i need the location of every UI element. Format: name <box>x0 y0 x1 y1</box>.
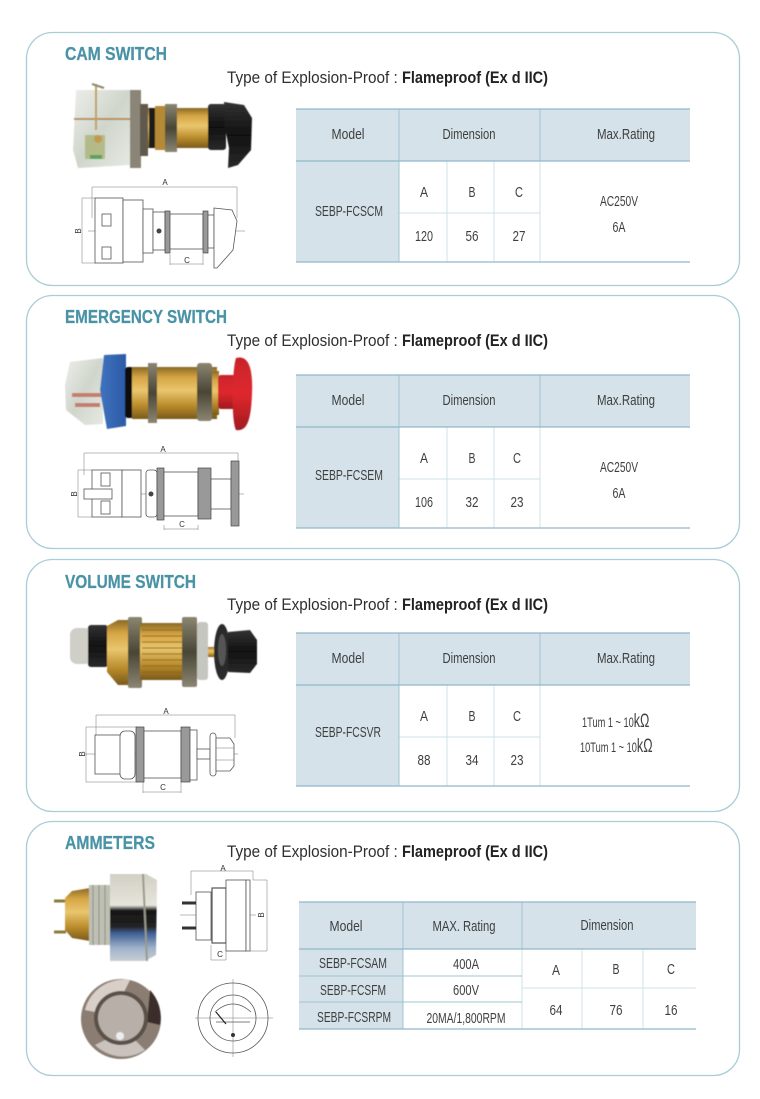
table: volume switch: 88 <box>418 753 430 769</box>
table: ammeters: Dimension <box>580 918 634 934</box>
explosion-proof type line: Flameproof (Ex d IIC) <box>402 68 548 87</box>
table: emergency switch: 32 <box>466 495 478 511</box>
dimension labels: B <box>70 491 79 497</box>
panel: emergency switch <box>26 296 740 548</box>
dimension labels: C <box>160 783 166 792</box>
table: ammeters: 76 <box>610 1003 622 1019</box>
table: emergency switch: 106 <box>415 495 433 511</box>
dimension labels: B <box>78 751 87 757</box>
table: ammeters: MAX. Rating <box>432 919 496 935</box>
dimension labels: B <box>74 228 83 234</box>
explosion-proof type line: Type of Explosion-Proof : <box>227 595 402 614</box>
table: ammeters: 16 <box>664 1003 678 1019</box>
table: cam switch: 56 <box>466 229 478 245</box>
table: emergency switch <box>296 375 690 528</box>
table: cam switch: A <box>420 185 428 201</box>
table: emergency switch: SEBP-FCSEM <box>315 468 383 484</box>
explosion-proof type line: Type of Explosion-Proof : <box>227 68 402 87</box>
table: volume switch: SEBP-FCSVR <box>315 725 381 741</box>
dimension labels: A <box>162 178 168 187</box>
dimension labels: C <box>217 950 223 959</box>
table: cam switch: 27 <box>512 229 526 245</box>
heading: emergency switch: EMERGENCY SWITCH <box>65 307 227 327</box>
photo: emergency switch <box>65 354 252 430</box>
dimension labels: A <box>163 707 169 716</box>
table: ammeters: 600V <box>453 983 479 999</box>
table: cam switch: Model <box>332 127 364 143</box>
table: volume switch: 23 <box>510 753 524 769</box>
dimension labels <box>78 707 169 792</box>
explosion-proof type line: Type of Explosion-Proof : <box>227 842 402 861</box>
dimension labels <box>217 864 266 959</box>
table: volume switch: Model <box>332 651 364 667</box>
table: ammeters <box>299 902 696 1029</box>
table: ammeters: A <box>552 963 560 979</box>
table: volume switch: Max.Rating <box>597 651 655 667</box>
table: emergency switch: C <box>513 451 521 467</box>
table: emergency switch: AC250V <box>600 460 638 476</box>
dimension labels: C <box>184 256 190 265</box>
panel: cam switch <box>26 32 740 286</box>
table: emergency switch: Dimension <box>442 393 496 409</box>
table: volume switch: 34 <box>466 753 478 769</box>
drawing: volume switch with dimensions <box>78 707 238 793</box>
table: volume switch: 1Tum 1 ~ 10kΩ <box>582 710 649 732</box>
table: emergency switch: Max.Rating <box>597 393 655 409</box>
dimension labels: A <box>220 864 226 873</box>
panel: ammeters <box>26 822 740 1076</box>
heading: volume switch: VOLUME SWITCH <box>65 572 196 592</box>
table: cam switch: C <box>515 185 523 201</box>
table: volume switch: A <box>420 709 428 725</box>
table: emergency switch: 23 <box>510 495 524 511</box>
table: emergency switch: B <box>468 451 476 467</box>
table: emergency switch: A <box>420 451 428 467</box>
drawing: ammeter front <box>195 979 273 1057</box>
table: cam switch: SEBP-FCSCM <box>315 204 383 220</box>
table: ammeters: 64 <box>550 1003 562 1019</box>
table: ammeters: Model <box>330 919 362 935</box>
table: cam switch: Dimension <box>442 127 496 143</box>
drawing: emergency switch with dimensions <box>70 445 244 530</box>
table: ammeters: SEBP-FCSRPM <box>317 1010 391 1026</box>
table: cam switch: Max.Rating <box>597 127 655 143</box>
table: volume switch: B <box>468 709 476 725</box>
table: emergency switch: 6A <box>612 486 626 502</box>
table: ammeters: SEBP-FCSFM <box>320 983 386 999</box>
table: ammeters: SEBP-FCSAM <box>319 956 387 972</box>
dimension labels: A <box>160 445 166 454</box>
table: cam switch: 6A <box>612 220 626 236</box>
table: volume switch: 10Tum 1 ~ 10kΩ <box>580 735 653 757</box>
table: volume switch <box>296 633 690 786</box>
table: cam switch: 120 <box>415 229 433 245</box>
photo: cam switch <box>73 84 252 168</box>
dimension labels: B <box>257 912 266 918</box>
table: cam switch: B <box>468 185 476 201</box>
dimension labels <box>74 178 190 265</box>
panel: volume switch <box>26 560 740 812</box>
explosion-proof type line: Flameproof (Ex d IIC) <box>402 842 548 861</box>
dimension labels: C <box>179 520 185 529</box>
table: ammeters: 20MA/1,800RPM <box>426 1011 506 1027</box>
photo: ammeter side <box>54 874 157 961</box>
table: ammeters: B <box>612 962 620 978</box>
heading: ammeters: AMMETERS <box>65 833 155 853</box>
photo: volume switch <box>70 617 257 688</box>
explosion-proof type line: Flameproof (Ex d IIC) <box>402 595 548 614</box>
explosion-proof type line: Type of Explosion-Proof : <box>227 331 402 350</box>
table: emergency switch: Model <box>332 393 364 409</box>
table: volume switch: C <box>513 709 521 725</box>
table: ammeters: 400A <box>453 957 479 973</box>
drawing: cam switch with dimensions <box>74 178 245 268</box>
table: ammeters: C <box>667 962 675 978</box>
table: volume switch: Dimension <box>442 651 496 667</box>
drawing: ammeter side with dimensions <box>180 864 267 960</box>
table: cam switch: AC250V <box>600 194 638 210</box>
explosion-proof type line: Flameproof (Ex d IIC) <box>402 331 548 350</box>
table: cam switch <box>296 109 690 262</box>
heading: cam switch: CAM SWITCH <box>65 44 167 64</box>
photo: ammeter front dial <box>81 979 161 1059</box>
dimension labels <box>70 445 185 529</box>
